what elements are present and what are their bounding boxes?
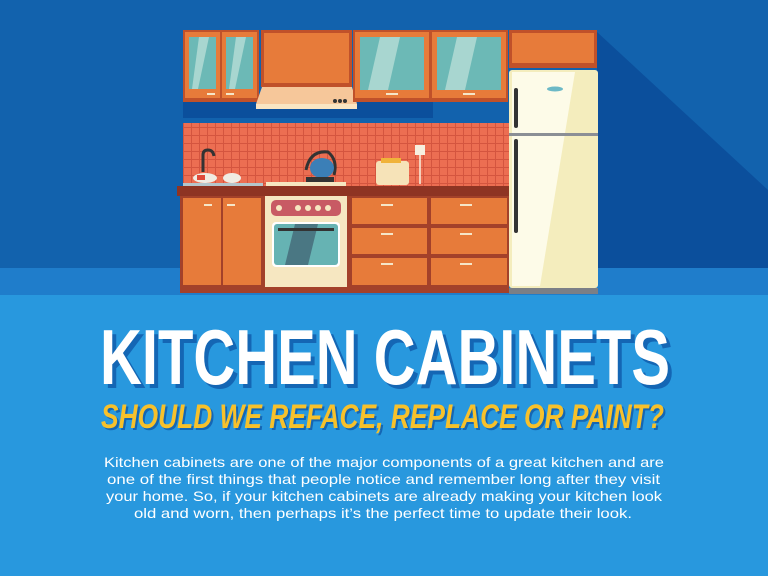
intro paragraph	[104, 454, 664, 521]
upper cabinet shadow	[183, 102, 433, 118]
glass cabinets right	[353, 30, 508, 102]
intro paragraph: Kitchen cabinets are one of the major components of a great kitchen and are	[104, 454, 664, 470]
fridge shadow	[597, 32, 768, 268]
fridge top cabinet	[509, 30, 597, 68]
sink and faucet	[183, 150, 263, 186]
kitchen illustration	[177, 30, 598, 294]
lower cabinets	[180, 196, 509, 293]
intro paragraph: one of the first things that people notice and remember long after they visit	[107, 471, 660, 487]
countertop	[177, 186, 509, 196]
oven	[265, 196, 347, 287]
left glass cabinets	[183, 30, 259, 102]
backsplash tiles	[183, 123, 509, 186]
hood cabinet	[261, 30, 352, 87]
intro paragraph: your home. So, if your kitchen cabinets are already making your kitchen look	[106, 488, 663, 504]
kettle	[266, 152, 346, 186]
refrigerator	[509, 70, 598, 294]
range hood	[256, 87, 357, 109]
intro paragraph: old and worn, then perhaps it’s the perfect time to update their look.	[134, 505, 632, 521]
toaster and socket	[376, 145, 425, 185]
